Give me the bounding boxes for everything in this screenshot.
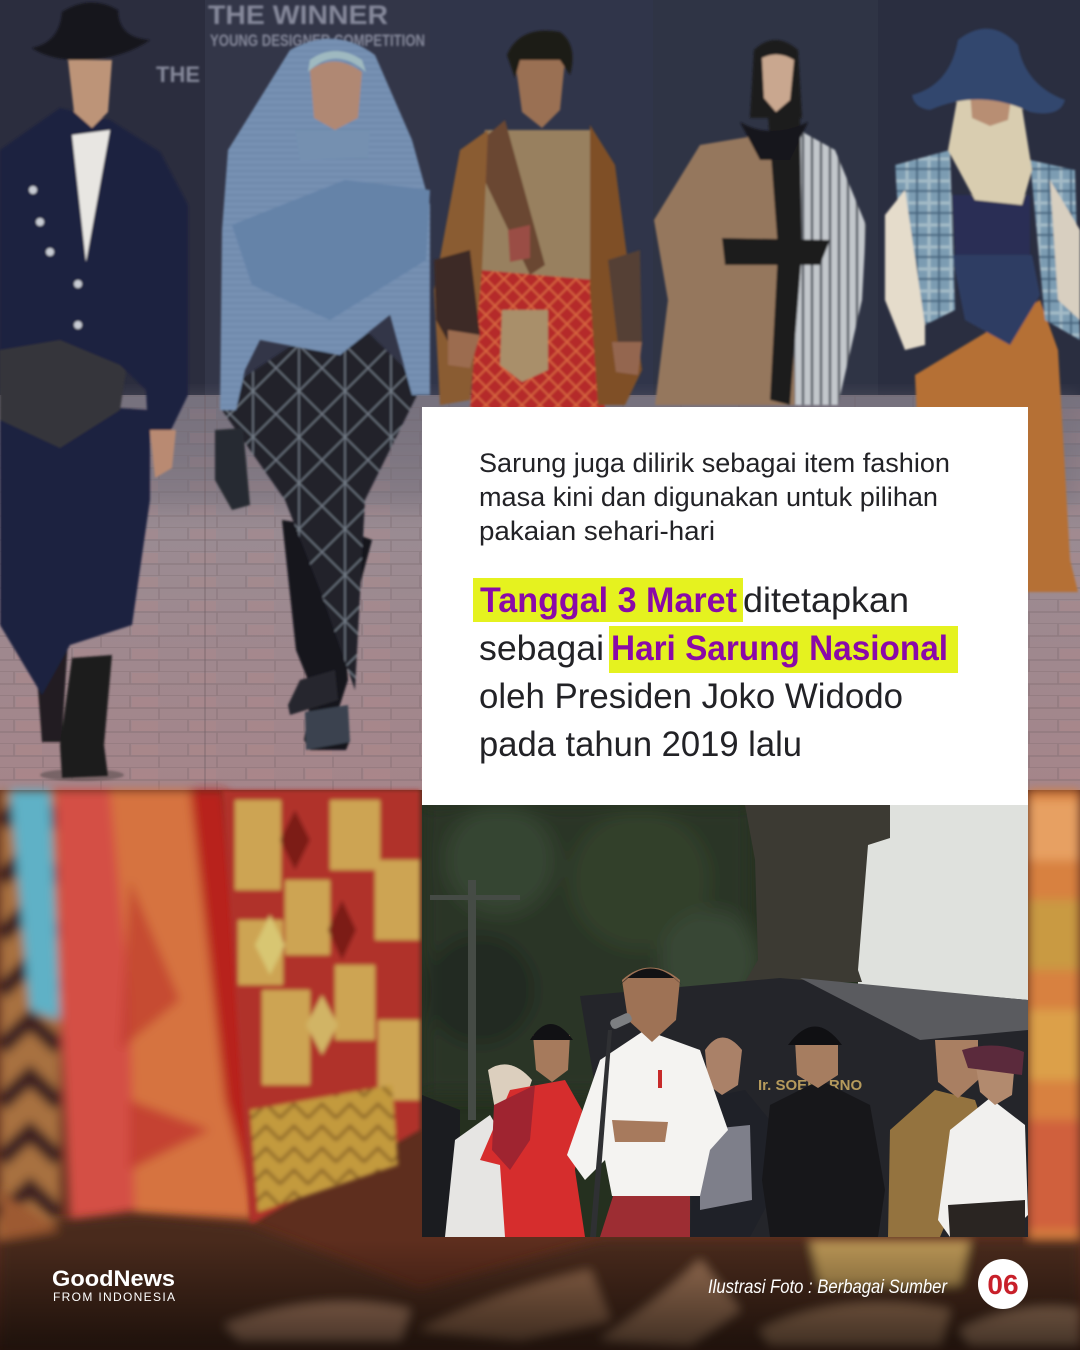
- runway backdrop: [155, 0, 878, 395]
- runway brick floor: [0, 395, 1080, 790]
- lamp post: [430, 880, 520, 1120]
- page number badge: 06: [987, 1269, 1019, 1300]
- statue: [745, 805, 890, 982]
- left woven folds: [0, 790, 258, 1240]
- highlighted date text: Tanggal 3 Maret: [480, 581, 737, 620]
- panel: runway photo collage: [0, 0, 1080, 790]
- logo: GoodNews from Indonesia: GoodNews: [52, 1266, 175, 1291]
- page number badge: [978, 1259, 1028, 1309]
- logo: GoodNews from Indonesia: [52, 1266, 175, 1304]
- panel: white text card: [422, 407, 1028, 805]
- main statement with highlights: [473, 578, 958, 764]
- main statement with highlights: sebagai: [479, 629, 604, 668]
- main statement with highlights: oleh Presiden Joko Widodo: [479, 677, 903, 716]
- photo credit: Ilustrasi Foto : Berbagai Sumber: [708, 1277, 948, 1298]
- panel: sarung fabric background photo: [0, 790, 1080, 1350]
- intro paragraph: Sarung juga dilirik sebagai item fashion: [479, 448, 950, 478]
- monument pedestal: [580, 978, 1028, 1237]
- model 5: blue hat, plaid vest and rust trousers: [885, 29, 1080, 592]
- runway backdrop: THE: [156, 62, 200, 87]
- photo: President Joko Widodo speaking at the monument: [422, 805, 1028, 1237]
- runway backdrop: YOUNG DESIGNER COMPETITION: [210, 31, 425, 50]
- trees: [422, 805, 760, 1095]
- intro paragraph: masa kini dan digunakan untuk pilihan: [479, 482, 938, 512]
- intro paragraph: [479, 448, 950, 546]
- highlight: date: [473, 578, 743, 622]
- highlight: national day: [609, 626, 958, 673]
- crowd: [422, 1024, 1028, 1237]
- highlighted national day text: Hari Sarung Nasional: [611, 629, 948, 668]
- Jokowi in white shirt: [567, 968, 728, 1237]
- model 4: tan coat with striped cloak: [654, 40, 866, 405]
- sky: [858, 805, 1028, 1000]
- main statement with highlights: pada tahun 2019 lalu: [479, 725, 802, 764]
- monument pedestal: Ir. SOEKARNO: [758, 1077, 863, 1094]
- runway backdrop: THE WINNER: [208, 0, 388, 30]
- model 3: brown vest with red sarung: [434, 31, 642, 410]
- right fabric strip: [1028, 790, 1080, 1240]
- songket check pattern: [222, 790, 420, 1225]
- lower feet and mat strip: [0, 1190, 1080, 1350]
- model 2: blue hooded knit with patterned skirt: [215, 39, 430, 750]
- intro paragraph: pakaian sehari-hari: [479, 516, 715, 546]
- main statement with highlights: ditetapkan: [743, 581, 909, 620]
- model 1: navy jacket and black hat: [0, 2, 188, 781]
- logo: GoodNews from Indonesia: FROM INDONESIA: [53, 1290, 175, 1304]
